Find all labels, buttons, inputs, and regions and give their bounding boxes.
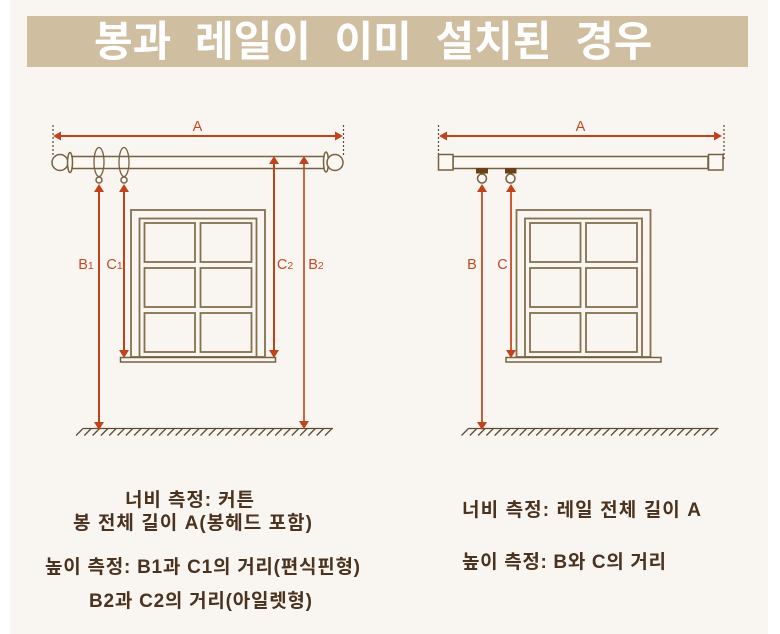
arrow B1 (78, 184, 104, 430)
arrow C (497, 184, 516, 358)
text block: rail measuring notes: 너비 측정: 레일 전체 길이 A (462, 499, 701, 521)
width dimension A (438, 119, 724, 160)
diagram: rod with curtain rings (52, 119, 344, 436)
width dimension A: A (193, 119, 203, 135)
arrow C: C (497, 257, 508, 273)
text block: rail measuring notes: 높이 측정: B와 C의 거리 (462, 551, 666, 573)
arrow B1: B1 (78, 257, 94, 273)
window (506, 210, 661, 362)
arrow C1 (106, 184, 129, 358)
curtain rod with finials (52, 152, 343, 172)
floor line (462, 428, 718, 436)
floor line (76, 428, 333, 436)
arrow B2: B2 (308, 257, 324, 273)
text block: rod measuring notes (45, 489, 360, 612)
arrow B: B (467, 257, 477, 273)
curtain rail with end caps (438, 154, 723, 170)
arrow B (467, 184, 487, 430)
eyelet rings (94, 148, 129, 183)
width dimension A: A (576, 119, 586, 135)
arrow B2 (299, 156, 324, 429)
text block: rail measuring notes (462, 499, 701, 573)
text block: rod measuring notes: 높이 측정: B1과 C1의 거리(편식핀형) (45, 556, 360, 578)
arrow C2 (269, 156, 293, 358)
width dimension A (53, 119, 344, 156)
rail carriers (476, 168, 516, 183)
text block: rod measuring notes: 너비 측정: 커튼 (125, 489, 254, 511)
title banner: 봉과 레일이 이미 설치된 경우 (94, 18, 652, 65)
arrow C1: C1 (106, 257, 123, 273)
window (120, 210, 276, 362)
text block: rod measuring notes: B2과 C2의 거리(아일렛형) (89, 590, 312, 612)
arrow C2: C2 (277, 257, 293, 273)
diagram: rail with carriers (438, 119, 724, 436)
text block: rod measuring notes: 봉 전체 길이 A(봉헤드 포함) (73, 512, 312, 534)
